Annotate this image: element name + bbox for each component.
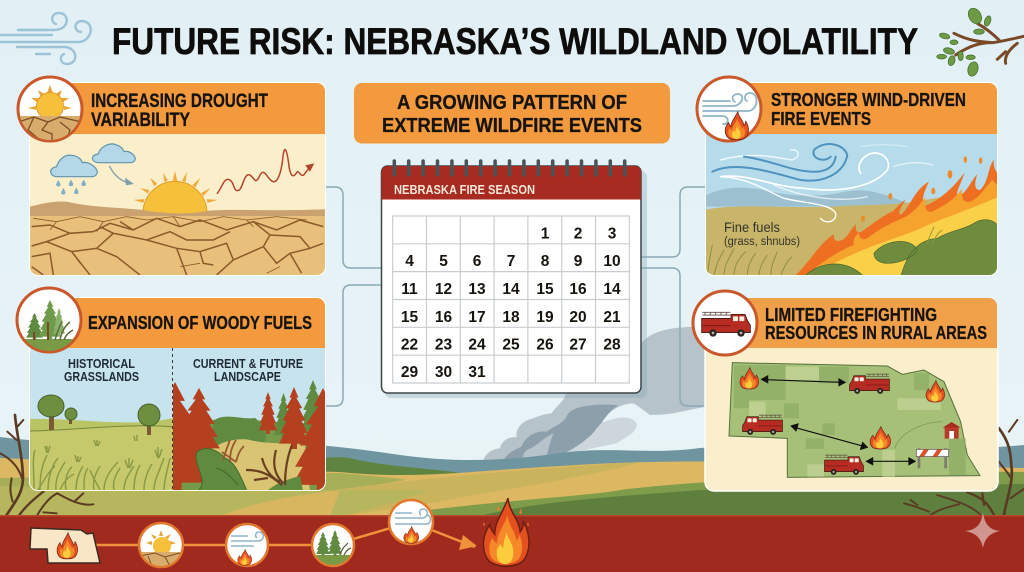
calendar dates: 14 [603, 281, 621, 298]
calendar dates: 10 [603, 253, 621, 270]
calendar dates: 16 [569, 281, 587, 298]
calendar dates: 4 [405, 253, 414, 270]
panel: stronger wind-driven fire events: FIRE EVENTS [771, 108, 871, 129]
icon: sun over cracked ground [18, 77, 82, 142]
station [943, 422, 961, 439]
calendar dates: 15 [401, 309, 418, 326]
calendar dates: 6 [473, 253, 482, 270]
calendar dates: 30 [435, 364, 452, 381]
icon: trees [17, 288, 81, 353]
smoke plume [483, 327, 707, 462]
icon: large flame [483, 498, 529, 566]
calendar dates: 11 [401, 281, 418, 298]
calendar dates: 5 [439, 253, 448, 270]
panel: increasing drought variability: VARIABILITY [91, 110, 190, 131]
calendar dates: 1 [541, 226, 550, 242]
calendar dates: 15 [536, 281, 554, 298]
calendar header: NEBRASKA FIRE SEASON [394, 183, 535, 197]
icon: fire truck [693, 291, 757, 355]
calendar dates: 7 [507, 253, 515, 270]
divider between historical and current [172, 348, 173, 489]
arrow head [459, 535, 477, 550]
calendar dates: 12 [435, 281, 452, 298]
binder rings [394, 161, 625, 175]
panel: growing pattern heading: A GROWING PATTERN OF [397, 91, 627, 114]
calendar dates: 14 [502, 281, 520, 298]
calendar dates: 28 [603, 336, 621, 354]
calendar dates: 21 [603, 309, 621, 326]
calendar dates: 19 [536, 309, 554, 326]
connector lines [325, 187, 706, 406]
calendar dates: 8 [541, 253, 550, 270]
calendar grid [393, 216, 629, 383]
calendar dates: 20 [569, 309, 587, 326]
bottom banner band [0, 498, 1024, 572]
bare branches bottom left [0, 415, 93, 515]
heading text: INCREASING DROUGHT [91, 91, 268, 112]
current and future landscape scene [173, 348, 325, 490]
timeline connector [96, 522, 475, 547]
calendar header [381, 166, 641, 200]
panel: expansion of woody fuels [17, 288, 354, 494]
header bar [30, 298, 325, 348]
panel: limited firefighting resources [693, 291, 998, 491]
landscape hills and fields [0, 437, 1024, 520]
panel: growing pattern heading: EXTREME WILDFIRE EVENTS [382, 114, 642, 137]
icon: wind and flame step two [389, 500, 433, 544]
calendar dates: 16 [435, 309, 452, 326]
calendar dates: 9 [574, 253, 583, 270]
header bar [706, 83, 997, 134]
panel: increasing drought variability [18, 77, 327, 279]
panel: growing pattern heading [354, 83, 670, 144]
panel: stronger wind-driven fire events: (grass, shnubs) [724, 236, 800, 248]
calendar dates: 2 [574, 226, 582, 242]
calendar [381, 161, 647, 398]
icon: wind swirls top left [0, 13, 91, 64]
drought scene [30, 134, 327, 279]
calendar dates: 27 [569, 336, 587, 354]
header bar [705, 298, 997, 348]
fire and truck markers [740, 367, 945, 475]
calendar dates: 29 [401, 364, 418, 381]
label: historical grasslands: HISTORICAL [68, 357, 135, 371]
nebraska map [729, 363, 980, 477]
heading text: EXPANSION OF WOODY FUELS [88, 312, 312, 333]
calendar dates: 13 [468, 281, 486, 298]
barricade [916, 448, 949, 468]
icon: trees step [312, 524, 354, 567]
icon: nebraska outline with flame [30, 528, 100, 563]
calendar dates: 24 [468, 336, 486, 354]
label: current and future landscape: LANDSCAPE [214, 370, 281, 384]
heading text: LIMITED FIREFIGHTING [765, 304, 937, 325]
historical grasslands scene [30, 348, 173, 491]
calendar dates: 3 [608, 226, 617, 242]
icon: wind and flame [697, 77, 761, 141]
header bar [30, 83, 325, 134]
icon: wind and flame step [226, 524, 268, 566]
heading text: STRONGER WIND-DRIVEN [771, 89, 966, 110]
bare branches bottom right [904, 420, 1024, 515]
label: historical grasslands: GRASSLANDS [64, 370, 139, 384]
calendar dates: 22 [401, 336, 418, 354]
calendar dates: 25 [502, 336, 520, 354]
sparkle watermark [965, 513, 1000, 548]
icon: leafy branch top right [937, 6, 1024, 77]
label: fine fuels: Fine fuels [724, 219, 780, 235]
icon: sun step [138, 522, 184, 568]
calendar dates: 17 [468, 309, 486, 326]
label: current and future landscape: CURRENT & FUTURE [193, 357, 303, 371]
panel: stronger wind-driven fire events [697, 77, 1004, 277]
calendar dates: 26 [536, 336, 554, 354]
calendar dates [401, 226, 621, 381]
calendar dates: 31 [468, 364, 486, 381]
calendar dates: 18 [502, 309, 520, 326]
calendar dates: 23 [435, 336, 452, 354]
